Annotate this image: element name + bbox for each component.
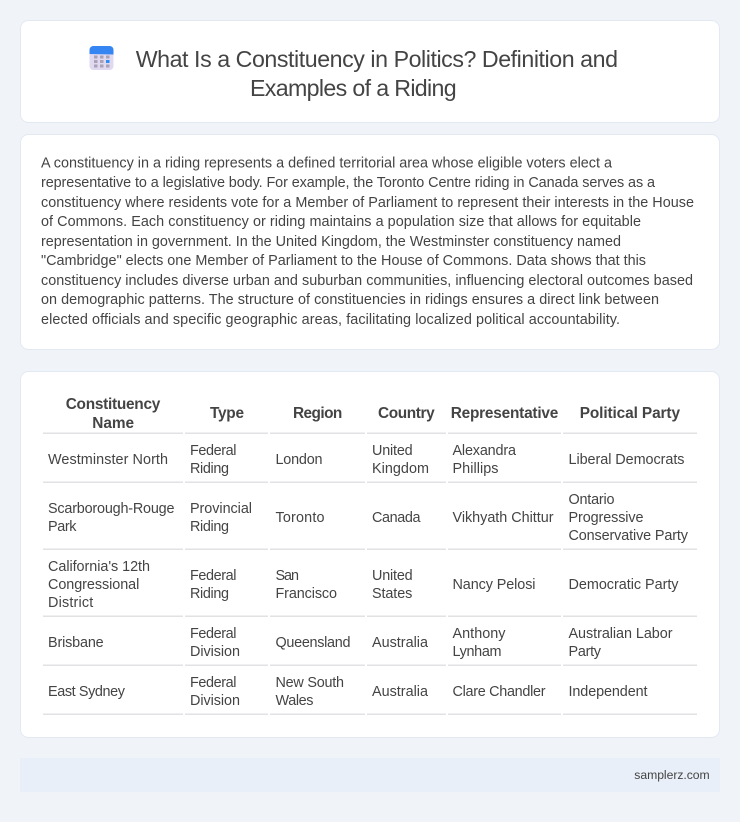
table header row: Country — [378, 405, 435, 422]
table row: California's 12th Congressional District — [43, 559, 697, 617]
panel: title header — [20, 20, 720, 122]
footer source text: samplerz.com — [634, 768, 710, 782]
table row: Brisbane: Party — [568, 644, 602, 660]
table row: East Sydney: Federal — [190, 675, 236, 691]
table row: Scarborough-Rouge Park: Conservative Party — [568, 528, 689, 544]
table row: Scarborough-Rouge Park — [43, 492, 697, 550]
table row: Brisbane: Queensland — [276, 635, 350, 651]
table header row — [43, 396, 697, 434]
table row: East Sydney: Clare Chandler — [452, 684, 546, 700]
table row: California's 12th Congressional District: Nancy Pelosi — [452, 577, 536, 593]
table header row: Type — [210, 405, 244, 422]
table row: East Sydney: Independent — [568, 684, 648, 700]
table row: Scarborough-Rouge Park: Riding — [190, 519, 229, 535]
table row: Westminster North: Alexandra — [452, 443, 516, 459]
table row: California's 12th Congressional District: States — [372, 586, 412, 602]
paragraph text: representation in government. In the United Kingdom, the Westminster constituency named — [41, 234, 621, 250]
table row: Westminster North: Westminster North — [48, 452, 168, 468]
paragraph text: "Cambridge" elects one Member of Parliament to the House of Commons. Data shows that this — [41, 253, 646, 269]
title: What Is a Constituency in Politics? Definition and — [136, 46, 618, 72]
table row: California's 12th Congressional District: Riding — [190, 586, 229, 602]
paragraph text — [41, 156, 694, 328]
paragraph text: representative to a legislative body. For example, the Toronto Centre riding in Canada serves as a — [41, 175, 655, 191]
table row: Scarborough-Rouge Park: Canada — [372, 510, 420, 526]
paragraph text: of Commons. Each constituency or riding maintains a population size that allows for equitable — [41, 214, 641, 230]
icon: calendar — [90, 46, 114, 70]
table header row: Constituency — [66, 396, 161, 413]
table row: Westminster North: Riding — [190, 461, 229, 477]
panel: constituency table — [20, 372, 720, 738]
paragraph text: constituency where residents vote for a Member of Parliament to represent their interests in the House — [41, 195, 694, 211]
table row: Scarborough-Rouge Park: Park — [48, 519, 77, 535]
table row: East Sydney: East Sydney — [48, 684, 126, 700]
table row: Scarborough-Rouge Park: Ontario — [568, 492, 614, 508]
table header row: Region — [293, 405, 342, 422]
table row: Scarborough-Rouge Park: Scarborough-Rouge — [48, 501, 174, 517]
paragraph text: constituency includes diverse urban and suburban communities, influencing electoral outcomes based — [41, 273, 693, 289]
table row: Westminster North: London — [276, 452, 322, 468]
table row: Brisbane: Australia — [372, 635, 428, 651]
table row: Brisbane — [43, 626, 697, 666]
title: Examples of a Riding — [250, 75, 457, 101]
table row: Brisbane: Anthony — [452, 626, 506, 642]
table row: California's 12th Congressional District: District — [48, 595, 93, 611]
table row: California's 12th Congressional District: United — [372, 568, 413, 584]
table row: Westminster North: United — [372, 443, 413, 459]
table row: California's 12th Congressional District: San — [276, 568, 299, 584]
table header row: Representative — [451, 405, 559, 422]
table row: Brisbane: Australian Labor — [568, 626, 673, 642]
table row: Scarborough-Rouge Park: Toronto — [276, 510, 324, 526]
table row: East Sydney — [43, 675, 697, 715]
paragraph text: A constituency in a riding represents a defined territorial area whose eligible voters elect a — [41, 156, 612, 172]
table row: Westminster North: Liberal Democrats — [568, 452, 684, 468]
table row: Brisbane: Brisbane — [48, 635, 104, 651]
table row: Westminster North: Phillips — [452, 461, 498, 477]
paragraph text: elected officials and specific geographic areas, facilitating localized political accountability. — [41, 312, 620, 328]
table row: California's 12th Congressional District: California's 12th — [48, 559, 150, 575]
table row: Brisbane: Division — [190, 644, 240, 660]
table row: Scarborough-Rouge Park: Provincial — [190, 501, 252, 517]
paragraph text: on demographic patterns. The structure of constituencies in ridings ensures a direct link between — [41, 292, 659, 308]
table row: California's 12th Congressional District: Democratic Party — [568, 577, 679, 593]
table row: East Sydney: Division — [190, 693, 240, 709]
table row: Brisbane: Lynham — [452, 644, 502, 660]
table row: Scarborough-Rouge Park: Vikhyath Chittur — [452, 510, 554, 526]
table row: Westminster North: Federal — [190, 443, 236, 459]
table row: Brisbane: Federal — [190, 626, 236, 642]
table row: East Sydney: New South — [276, 675, 344, 691]
table header row: Political Party — [580, 405, 680, 422]
footer bar — [20, 758, 720, 792]
table row: California's 12th Congressional District: Francisco — [276, 586, 337, 602]
panel: definition paragraph — [20, 134, 720, 350]
table row: Westminster North: Kingdom — [372, 461, 429, 477]
table row: Westminster North — [43, 443, 697, 483]
table row: California's 12th Congressional District: Federal — [190, 568, 236, 584]
title — [136, 46, 618, 101]
table header row: Name — [92, 415, 134, 432]
table row: California's 12th Congressional District: Congressional — [48, 577, 139, 593]
table row: Scarborough-Rouge Park: Progressive — [568, 510, 644, 526]
table row: East Sydney: Australia — [372, 684, 428, 700]
table row: East Sydney: Wales — [276, 693, 314, 709]
